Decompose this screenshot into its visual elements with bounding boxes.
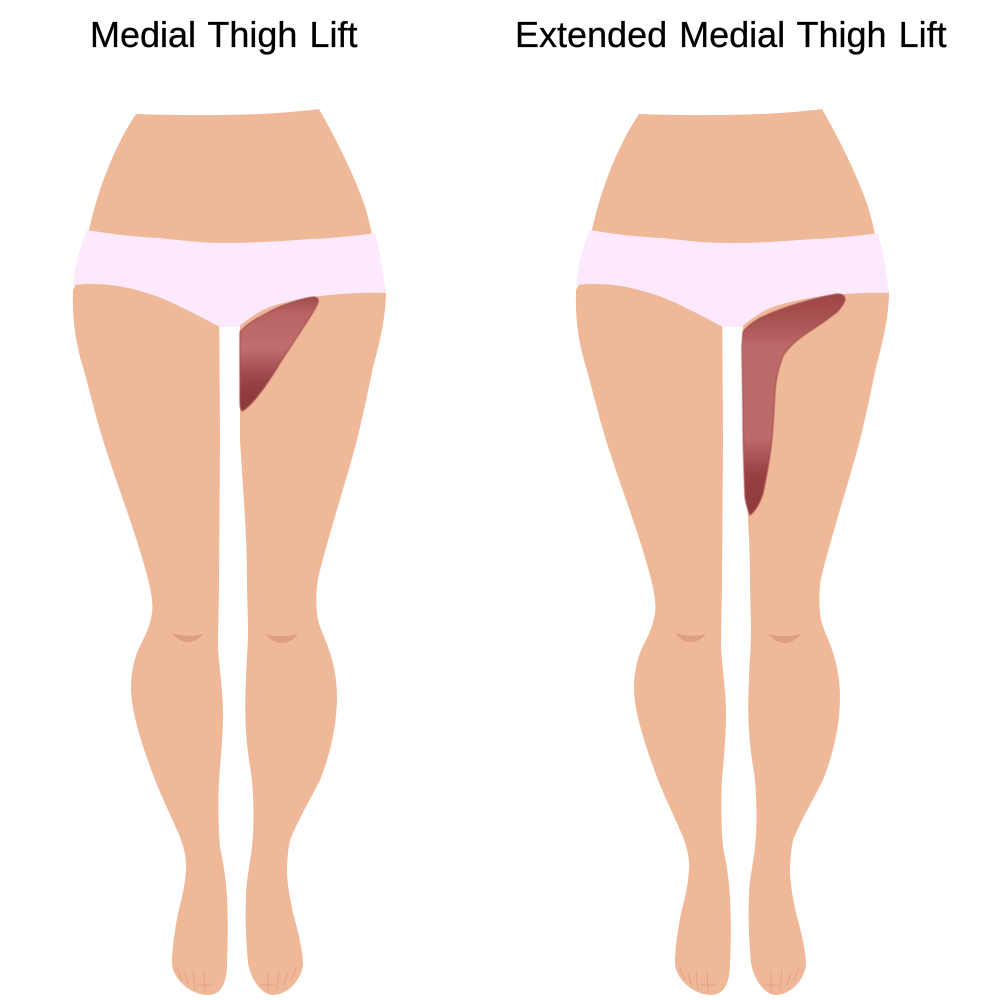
figure: medial thigh lift xyxy=(73,109,386,995)
right leg xyxy=(240,292,386,995)
knee creases xyxy=(675,633,801,643)
toes xyxy=(680,968,799,993)
figure: extended medial thigh lift xyxy=(576,109,889,995)
title: Extended Medial Thigh Lift: Extended Medial Thigh Lift xyxy=(515,14,947,55)
torso xyxy=(85,109,375,250)
left leg xyxy=(73,284,228,995)
right leg xyxy=(743,292,889,995)
toes xyxy=(177,968,296,993)
underwear xyxy=(576,230,889,327)
knee creases xyxy=(172,633,298,643)
torso xyxy=(588,109,878,250)
left leg xyxy=(576,284,731,995)
title: Medial Thigh Lift: Medial Thigh Lift xyxy=(90,14,357,55)
underwear xyxy=(73,230,386,327)
incision area xyxy=(240,297,318,411)
incision area xyxy=(742,294,845,515)
